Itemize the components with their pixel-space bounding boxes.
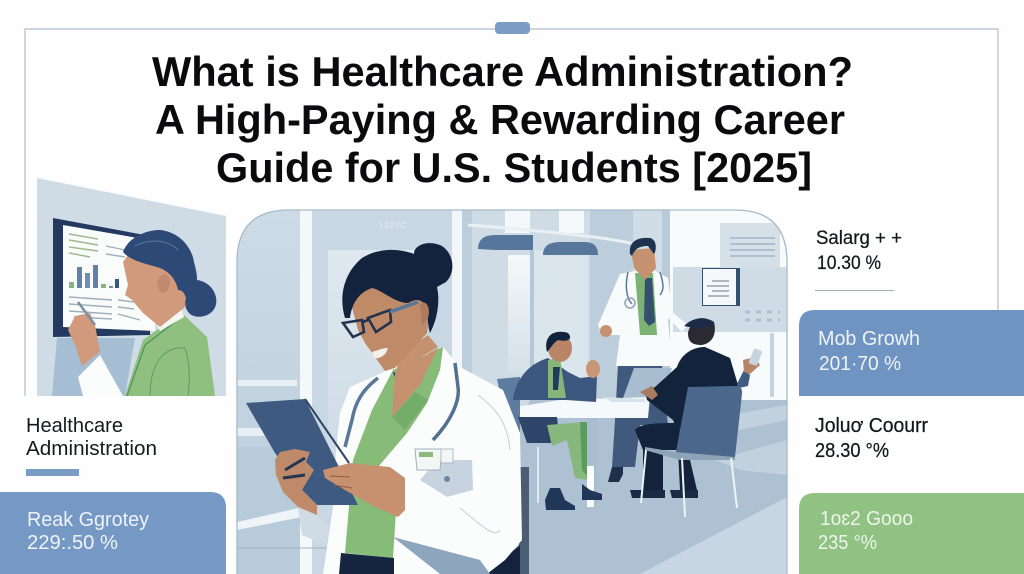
- stat card: job growth: [799, 310, 1024, 396]
- stat card: blue left: 229:.50 %: [27, 532, 118, 554]
- dark chair behind: [519, 467, 529, 574]
- sleeve cuff left: [298, 507, 330, 540]
- stat: salary: [815, 228, 902, 291]
- figure: woman in green jacket: [68, 230, 216, 396]
- title: [152, 48, 853, 191]
- label: healthcare administration: [26, 415, 157, 476]
- chair: [641, 386, 742, 517]
- shirt: [345, 347, 443, 558]
- icon: ceiling lamps: [478, 235, 598, 255]
- figure: main doctor with tablet: [246, 243, 529, 574]
- face: [123, 256, 186, 327]
- table: [515, 397, 650, 507]
- tablet: [246, 399, 358, 505]
- wall screen: [702, 268, 740, 306]
- outer frame: [25, 22, 998, 396]
- sleeve and hand: [78, 355, 123, 396]
- hair: [123, 230, 216, 317]
- jacket: [125, 313, 215, 396]
- stat card: green: 1oɛ2 Gooo: [820, 508, 913, 530]
- laptop: [623, 368, 672, 398]
- head: [352, 288, 428, 371]
- neck: [396, 335, 438, 372]
- stat card: green: 235 °%: [818, 532, 877, 554]
- label: healthcare administration: Healthcare: [26, 415, 123, 437]
- icon: wall monitor with charts: [53, 218, 155, 337]
- stat: job course: Joluơ Coourr: [815, 415, 928, 437]
- icon: id badge: [415, 449, 453, 482]
- title: A High-Paying & Rewarding Career: [155, 96, 845, 143]
- label: healthcare administration: Administration: [26, 438, 157, 460]
- stat card: job growth: Mob Growh: [818, 328, 920, 350]
- stat: job course: 28.30 °%: [815, 440, 889, 462]
- stat: job course: [815, 415, 928, 462]
- accent bar: [26, 469, 79, 476]
- stat: salary: Salarg + +: [816, 228, 902, 249]
- hands: [275, 449, 317, 515]
- panel: left illustration, administrator at monitor: [37, 178, 226, 396]
- eyeglasses: [343, 310, 391, 337]
- panel: central hospital scene: [237, 210, 787, 574]
- stat card: blue left: Reak Ggrotey: [27, 509, 149, 531]
- title: Guide for U.S. Students [2025]: [216, 144, 812, 191]
- stat: salary: 10.30 %: [817, 253, 881, 274]
- background architecture: 1207C: [379, 221, 408, 230]
- stat card: green: [799, 493, 1024, 574]
- background architecture: [237, 210, 787, 574]
- main scene border: [237, 210, 787, 574]
- coat: [323, 347, 522, 574]
- figure: standing doctor: [598, 238, 688, 482]
- collar: [157, 310, 184, 331]
- frame tab: [495, 22, 530, 34]
- stat card: job growth: 201·70 %: [819, 353, 901, 375]
- title: What is Healthcare Administration?: [152, 48, 853, 95]
- figure: seated woman: [497, 332, 602, 510]
- figure: seated man with phone: [630, 318, 763, 498]
- stat card: blue left: [0, 492, 226, 574]
